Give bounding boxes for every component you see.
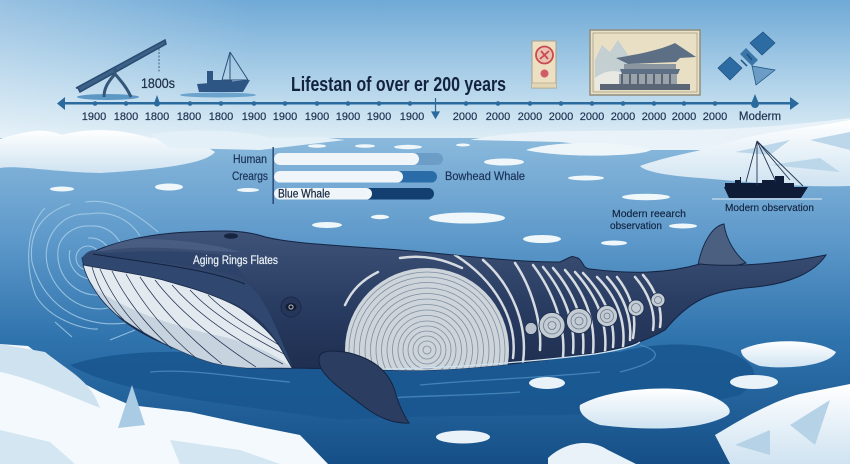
timeline year labels: 1900 bbox=[336, 111, 360, 123]
label: modern research observation: Modern reearch bbox=[612, 208, 686, 220]
timeline year labels: 2000 bbox=[486, 111, 510, 123]
timeline year labels: 2000 bbox=[642, 111, 666, 123]
timeline year labels: 2000 bbox=[672, 111, 696, 123]
whale eye bbox=[281, 297, 301, 317]
whale flipper bbox=[319, 351, 409, 423]
timeline year labels: 1800 bbox=[145, 111, 169, 123]
whale age rings bbox=[344, 255, 662, 370]
whale tail fin bbox=[698, 224, 746, 267]
icon: framed temple picture bbox=[590, 30, 700, 95]
timeline year labels: Moderm bbox=[739, 111, 781, 123]
sky background bbox=[0, 0, 850, 150]
bar: blue whale: Blue Whale bbox=[278, 188, 330, 200]
iceberg: bottom right bbox=[715, 384, 850, 464]
ice shelf: right bbox=[640, 120, 850, 186]
whale baleen plates bbox=[83, 265, 292, 368]
foreground ice bbox=[0, 341, 850, 464]
whale bbox=[82, 224, 826, 432]
timeline year labels bbox=[82, 111, 781, 123]
timeline year labels: 1900 bbox=[367, 111, 391, 123]
timeline bbox=[57, 94, 799, 123]
timeline year labels: 1900 bbox=[273, 111, 297, 123]
icon: research ship bbox=[712, 141, 822, 199]
whale head highlight bbox=[96, 239, 240, 252]
small floes bbox=[730, 375, 778, 389]
timeline year labels: 1900 bbox=[305, 111, 329, 123]
timeline year labels: 2000 bbox=[703, 111, 727, 123]
ice shelf: right distant bbox=[470, 118, 850, 150]
bar: creargs bbox=[232, 171, 437, 183]
whale waterline bbox=[385, 342, 640, 369]
whale curved stripes bbox=[345, 255, 661, 362]
ice shelf: left distant bbox=[150, 131, 345, 150]
small ice floes bbox=[50, 144, 697, 246]
label: modern research observation: observation bbox=[610, 220, 662, 232]
iceberg: right floe upper bbox=[741, 341, 836, 367]
label: bowhead whale: Bowhead Whale bbox=[445, 169, 525, 183]
timeline year labels: 1900 bbox=[82, 111, 106, 123]
bar: human: Human bbox=[233, 154, 267, 166]
distant ice shelves bbox=[0, 118, 850, 186]
bar chart axis bbox=[272, 147, 274, 204]
label: 1800s: 1800s bbox=[141, 76, 175, 91]
bar: blue whale bbox=[274, 188, 434, 200]
timeline year labels: 2000 bbox=[611, 111, 635, 123]
label: modern research observation bbox=[610, 208, 686, 232]
timeline year labels: 2000 bbox=[580, 111, 604, 123]
title: Lifestan of over er 200 years bbox=[291, 74, 506, 96]
timeline year labels: 2000 bbox=[549, 111, 573, 123]
timeline year labels: 1800 bbox=[114, 111, 138, 123]
ice shelf: left bbox=[0, 130, 215, 173]
bar: creargs: Creargs bbox=[232, 171, 268, 183]
iceberg: bottom left bbox=[0, 344, 328, 464]
whale body bbox=[82, 231, 826, 370]
sonar rings bbox=[29, 201, 158, 340]
timeline axis with arrows bbox=[57, 94, 799, 110]
icon: red seal scroll bbox=[532, 41, 556, 88]
iceberg: right floe large bbox=[580, 388, 730, 429]
timeline year labels: 1800 bbox=[177, 111, 201, 123]
timeline year labels: 1800 bbox=[209, 111, 233, 123]
whale upper jaw band bbox=[82, 250, 293, 368]
bar chart: lifespan comparison bbox=[232, 147, 525, 204]
icon: whaling ship bbox=[180, 52, 256, 98]
icon: satellite bbox=[718, 32, 775, 85]
timeline marker arrow bbox=[432, 98, 439, 118]
water shadow around whale bbox=[70, 344, 754, 420]
whale ring medallions bbox=[525, 293, 665, 338]
timeline year labels: 1900 bbox=[400, 111, 424, 123]
bar: human bbox=[233, 153, 443, 166]
sea background bbox=[0, 138, 850, 464]
label: modern observation: Modern observation bbox=[725, 202, 814, 214]
timeline year labels: 1900 bbox=[242, 111, 266, 123]
whale blowhole bbox=[224, 233, 238, 239]
icon: whaling harpoon crane bbox=[76, 40, 166, 100]
ice shelf: centre floe bbox=[526, 143, 651, 156]
timeline year labels: 2000 bbox=[453, 111, 477, 123]
label: aging rings: Aging Rings Flates bbox=[193, 255, 278, 267]
timeline year labels: 2000 bbox=[518, 111, 542, 123]
